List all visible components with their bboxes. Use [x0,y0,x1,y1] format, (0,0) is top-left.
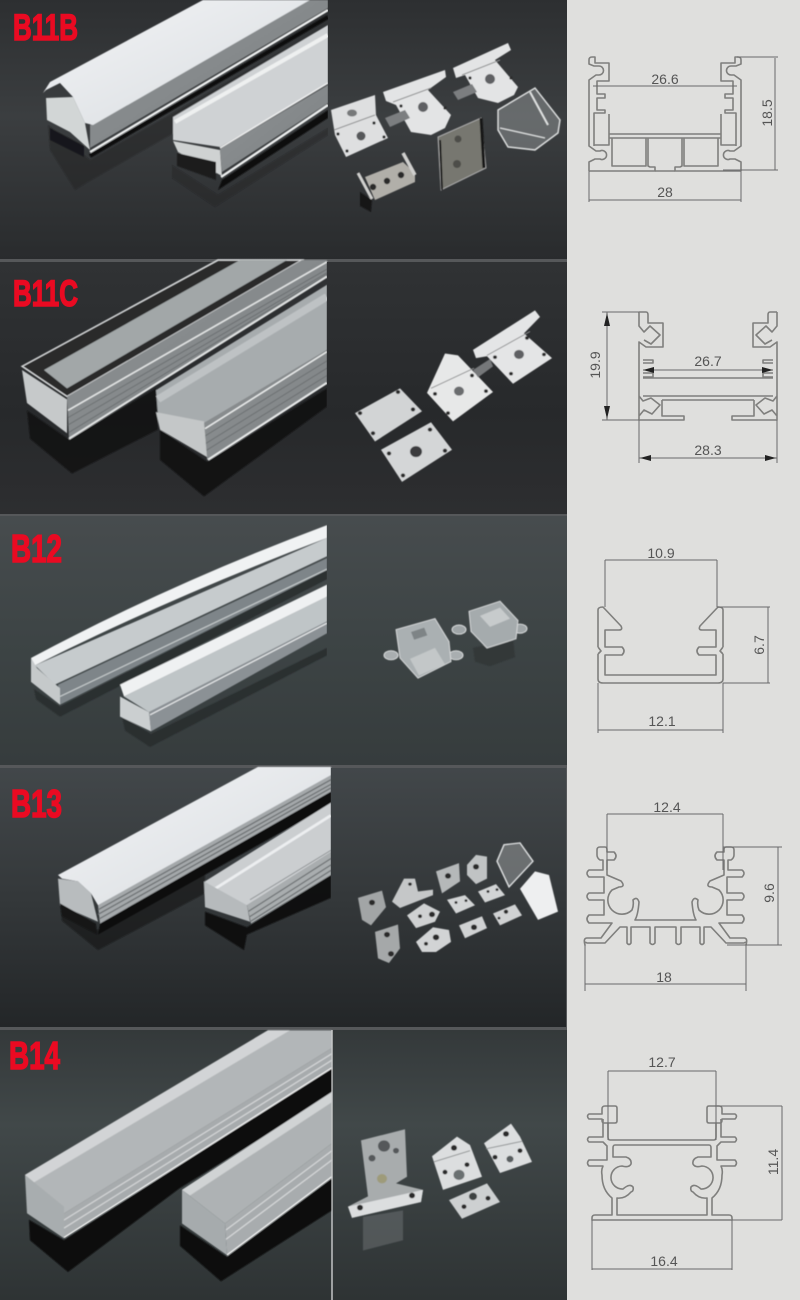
bracket D [473,310,552,384]
first profile front [22,370,67,433]
panel: B14 cross-section drawing [588,1054,782,1270]
dimension lines: 28 [657,184,673,200]
second profile front [120,697,151,731]
piece 4 [467,855,487,884]
panel: B12 profile photo [0,516,327,765]
piece 10 [493,904,522,925]
first profile side [63,1048,332,1237]
dimension lines: 12.4 [653,799,681,815]
first profile reflection [60,870,205,950]
piece 2 [392,879,433,908]
piece 3 [436,863,460,893]
inner lens [44,260,287,388]
second profile front [204,881,250,922]
first profile side [67,260,327,440]
dimension lines [598,545,770,733]
first profile reflection [34,570,327,717]
second profile top [182,1092,332,1223]
dimension lines: 26.6 [651,71,679,87]
dimension lines: 11.4 [765,1149,781,1175]
first profile top rail [31,525,327,665]
bracket C [427,354,493,421]
clear dome cap [498,88,560,150]
second profile top [173,25,328,147]
first profile side [90,0,328,148]
dimension lines [585,799,782,991]
dimension lines: 26.7 [694,353,722,369]
panel: B13 profile photo [0,767,331,1027]
dark bracket [438,118,486,190]
right column background [567,0,800,1300]
second profile front [156,412,207,457]
panel: B11C accessories [327,262,567,514]
dimension lines: 18 [656,969,672,985]
second profile front [182,1190,227,1255]
round bracket [383,70,451,135]
second profile rail [120,585,327,697]
dimension lines: 12.7 [648,1054,676,1070]
panel: B11B cross-section drawing [589,57,778,202]
clear clip A [384,619,463,678]
profile outline [588,1106,736,1220]
dimension lines: 9.6 [761,883,777,903]
piece 11 [459,916,487,938]
panel: B12 cross-section drawing [598,545,770,733]
first profile front [25,1175,64,1238]
dimension lines [589,57,778,202]
panel: B14 accessories [332,1030,567,1300]
clear clip B [452,601,527,666]
left and middle gap background [0,0,567,1300]
panel: B11C cross-section drawing [587,312,777,463]
small bracket [358,153,415,212]
corner bracket B [484,1124,532,1173]
dimension lines: 28.3 [694,442,722,458]
second profile side [149,621,327,731]
first profile lens [58,767,331,905]
first profile front [31,658,60,705]
first profile side [58,558,327,705]
plate B [381,422,452,482]
profile outline [589,57,741,171]
first profile front [58,879,98,922]
dimension lines: 16.4 [650,1253,678,1269]
piece 6: white cap [520,871,558,920]
first profile front [46,97,90,150]
second profile side [220,85,328,172]
panel: B11B accessories [328,0,567,259]
second profile black underside [180,1179,332,1281]
bracket with screw [348,1129,423,1251]
second profile reflection [172,128,328,207]
dimension lines: 12.1 [648,713,676,729]
piece 12 [416,927,451,952]
dimension lines: 6.7 [751,635,767,655]
label: B11C: B11C [13,273,78,314]
second profile front [173,141,222,176]
second profile side [225,1143,332,1255]
second profile top [205,803,331,905]
plate [449,1183,500,1219]
dimension lines [592,1054,782,1270]
second profile ribs [247,852,331,924]
plate A [355,388,422,442]
piece 7 [407,903,440,928]
dimension lines: 18.5 [759,99,775,127]
first profile lens [43,0,310,125]
profile outline [639,312,777,420]
second profile top [156,285,327,423]
black frame [22,260,302,397]
label: B13: B13 [11,783,62,826]
panel: B12 accessories [327,516,567,765]
label: B14: B14 [9,1035,60,1078]
dimension lines: 10.9 [647,545,675,561]
first profile reflection [48,25,328,190]
first profile body [35,538,327,685]
panel: B11C profile photo [0,260,327,514]
piece 8 [447,895,475,914]
second profile body [124,597,327,712]
piece 13 [375,925,400,963]
profile outline [598,607,723,683]
piece 9 [478,884,505,903]
first profile black underside [29,1067,332,1272]
corner bracket A [432,1137,482,1190]
label: B12: B12 [11,528,62,571]
panel: B13 accessories [331,768,566,1027]
dimension lines [587,312,777,463]
profile outline [584,847,747,945]
piece 5: clear cap [497,843,533,887]
first profile reflection [27,388,158,474]
panel: B14 profile photo [0,1030,332,1300]
label: B11B: B11B [13,7,78,48]
piece 1 [358,891,386,925]
first profile top [25,1030,332,1214]
panel: B11B profile photo [0,0,328,259]
second profile reflection [160,388,327,497]
bracket plate [331,95,388,157]
panel: B13 cross-section drawing [584,799,782,991]
dimension lines: 19.9 [587,351,603,379]
second profile reflection [122,648,327,747]
round bracket 2 [453,43,518,103]
first profile ribs [98,775,331,924]
second profile side [204,350,327,460]
